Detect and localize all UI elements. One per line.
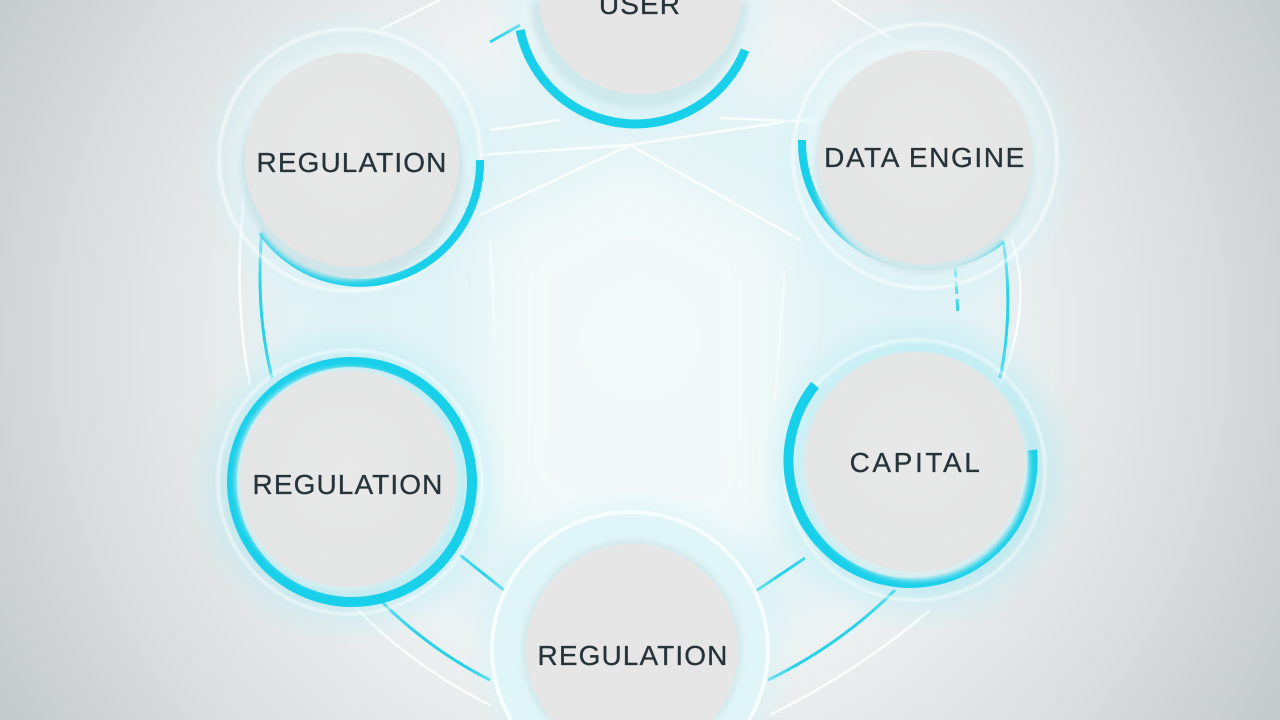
node: DATA ENGINE: DATA ENGINE	[824, 142, 1026, 173]
node: USER	[485, 0, 785, 145]
node: CAPITAL	[755, 305, 1085, 635]
node: CAPITAL: CAPITAL	[850, 447, 982, 478]
network lines	[240, 0, 1020, 715]
node: REGULATION bottom	[467, 485, 797, 720]
node: REGULATION left: REGULATION	[253, 469, 443, 500]
node: REGULATION top left	[195, 5, 505, 315]
central hexagon glow	[260, 40, 1000, 700]
node: REGULATION top left: REGULATION	[257, 147, 447, 178]
node: REGULATION left	[183, 317, 513, 647]
node: REGULATION bottom: REGULATION	[538, 640, 728, 671]
node: DATA ENGINE	[765, 0, 1085, 318]
